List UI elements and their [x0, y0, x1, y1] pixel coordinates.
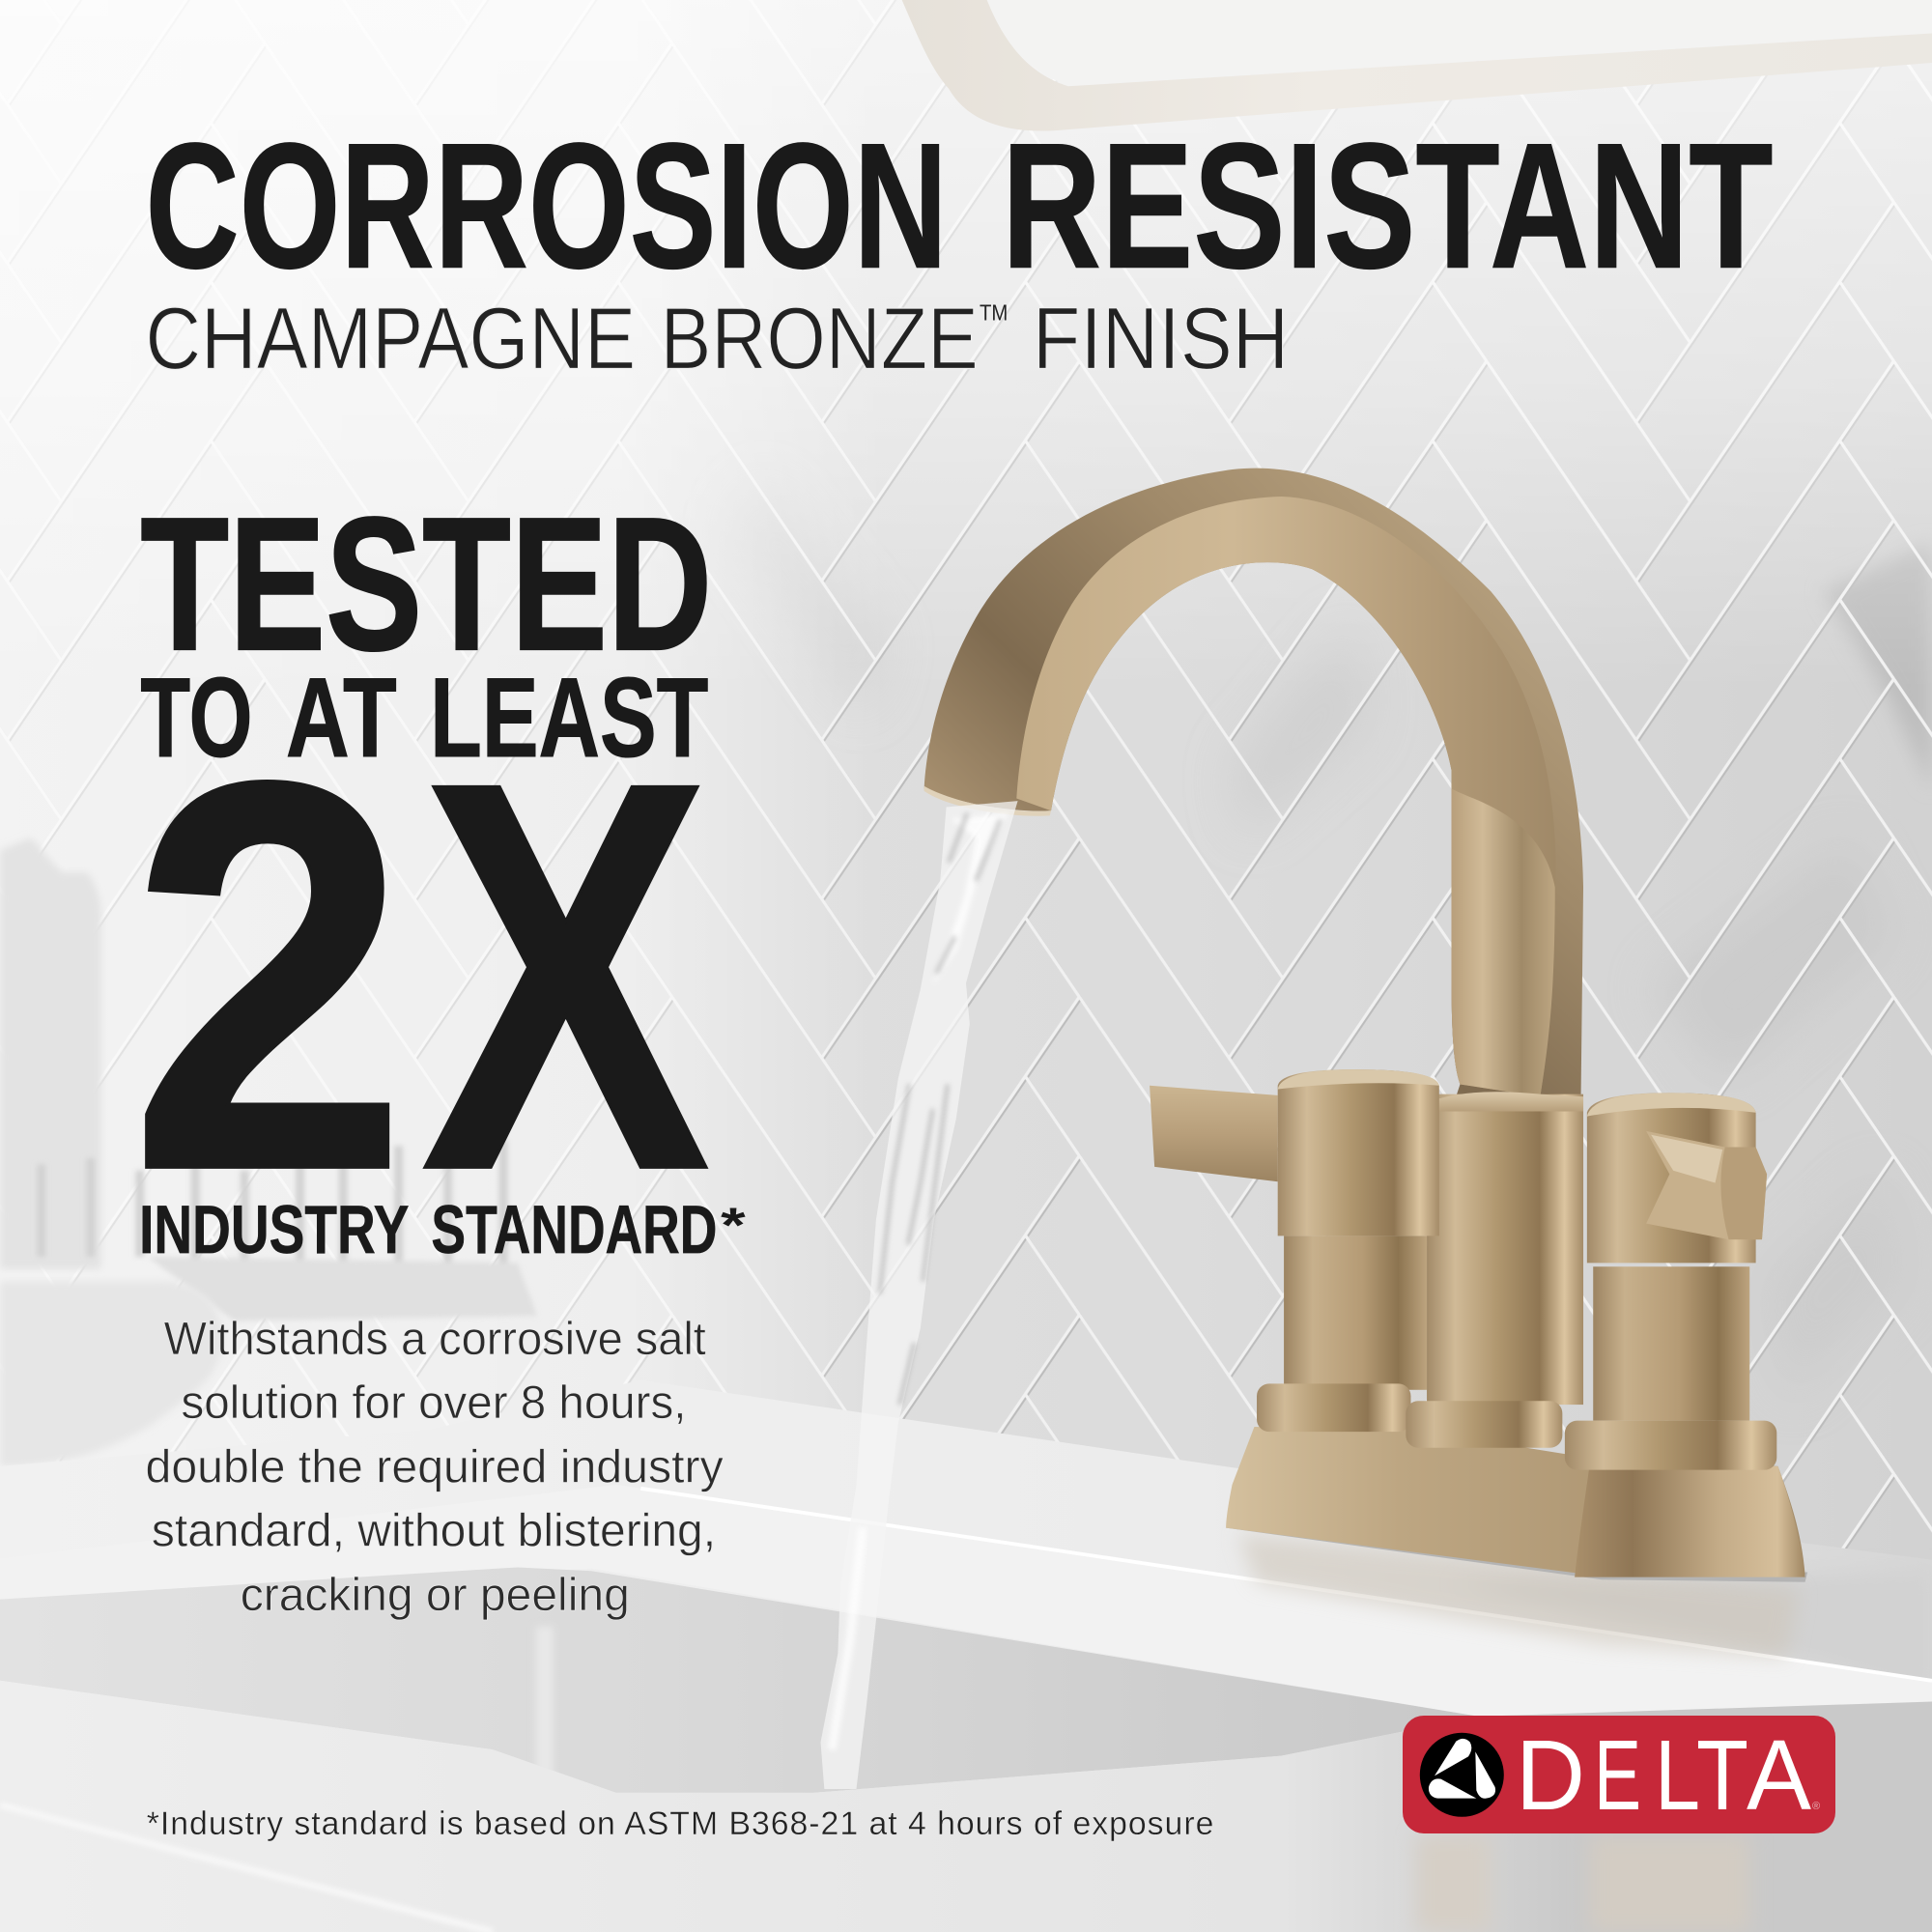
claim: tested to at least 2x industry standard: AT — [286, 654, 397, 781]
title: CORROSION — [146, 107, 948, 306]
claim: tested to at least 2x industry standard: X — [421, 668, 712, 1285]
sink basin — [0, 1567, 1479, 1793]
claim: tested to at least 2x industry standard: LEAST — [430, 654, 708, 781]
claim: tested to at least 2x industry standard: TESTED — [140, 477, 712, 690]
claim: tested to at least 2x industry standard: STANDARD — [431, 1191, 717, 1267]
soap dish — [0, 1282, 224, 1466]
claim: tested to at least 2x industry standard — [129, 477, 746, 1285]
mirror with cream frame — [902, 0, 1932, 131]
title — [146, 107, 1773, 306]
subtitle — [146, 290, 1289, 387]
description text: solution for over 8 hours, — [182, 1377, 686, 1429]
wordmark: A — [1747, 1719, 1811, 1831]
description text: cracking or peeling — [241, 1569, 630, 1621]
blurred countertop objects — [0, 838, 537, 1466]
subtitle: BRONZE — [661, 290, 979, 387]
claim: tested to at least 2x industry standard: TO — [140, 654, 252, 781]
centre column — [1406, 1092, 1583, 1448]
description text — [146, 1313, 724, 1621]
water stream — [820, 801, 1018, 1789]
subtitle: TM — [980, 300, 1008, 326]
right handle with lever — [1565, 1093, 1776, 1470]
description text: standard, without blistering, — [152, 1505, 716, 1557]
reflective counter right — [1282, 1701, 1932, 1932]
subtitle: FINISH — [1033, 290, 1289, 387]
wordmark: E — [1594, 1719, 1641, 1831]
claim: tested to at least 2x industry standard: INDUSTRY — [139, 1191, 409, 1267]
Delta logo badge: ® — [1812, 1801, 1820, 1812]
left handle lower cylinder and flange — [1257, 1236, 1427, 1432]
champagne bronze faucet — [924, 469, 1807, 1582]
counter surface — [0, 1380, 1932, 1932]
deck plate — [1226, 1523, 1807, 1582]
Delta logo badge — [1403, 1716, 1835, 1833]
white countertop and sink — [0, 1380, 1932, 1932]
logo mark — [1420, 1733, 1504, 1817]
spout — [924, 469, 1583, 1103]
wordmark: T — [1696, 1719, 1748, 1831]
subtitle: CHAMPAGNE — [146, 290, 636, 387]
wordmark — [1516, 1719, 1811, 1831]
description text: double the required industry — [146, 1440, 724, 1492]
toothbrush rack — [37, 1140, 537, 1321]
faucet reflection on counter — [1238, 1534, 1799, 1658]
counter front edge — [0, 1485, 1932, 1717]
bottle — [0, 838, 101, 1269]
left handle upper cylinder and lever — [1150, 1069, 1439, 1236]
footnote: *Industry standard is based on ASTM B368-21 at 4 hours of exposure — [147, 1805, 1213, 1842]
description text: Withstands a corrosive salt — [164, 1313, 706, 1365]
front lip — [0, 1681, 1282, 1932]
wordmark: L — [1655, 1719, 1700, 1831]
claim: tested to at least 2x industry standard: * — [721, 1198, 746, 1253]
claim: tested to at least 2x industry standard: 2 — [129, 668, 408, 1285]
wordmark: D — [1516, 1719, 1585, 1831]
